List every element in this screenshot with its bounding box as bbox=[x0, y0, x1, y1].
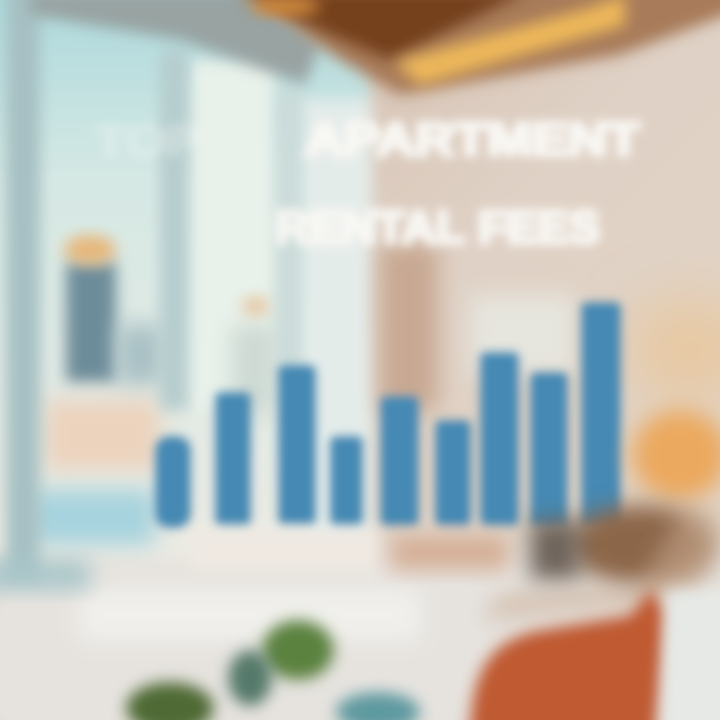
title bbox=[95, 113, 640, 253]
title: FEES bbox=[478, 201, 600, 253]
person / chair back bbox=[480, 500, 720, 620]
wall column bbox=[380, 245, 438, 410]
title: TOP bbox=[95, 117, 200, 164]
wall panel behind chart bbox=[470, 295, 575, 375]
city skyline bbox=[30, 235, 277, 545]
orange armchair bbox=[470, 590, 720, 720]
window with sky view bbox=[0, 0, 372, 560]
table lamp bbox=[632, 410, 720, 500]
ceiling with warm light bbox=[225, 0, 720, 95]
green plants bbox=[126, 620, 420, 720]
window frames bbox=[6, 0, 320, 580]
title: RENTAL bbox=[275, 201, 465, 253]
wall lamp glow bbox=[630, 300, 720, 400]
title: APARTMENT bbox=[305, 113, 640, 165]
table bbox=[0, 530, 510, 640]
bar chart bbox=[155, 302, 621, 528]
